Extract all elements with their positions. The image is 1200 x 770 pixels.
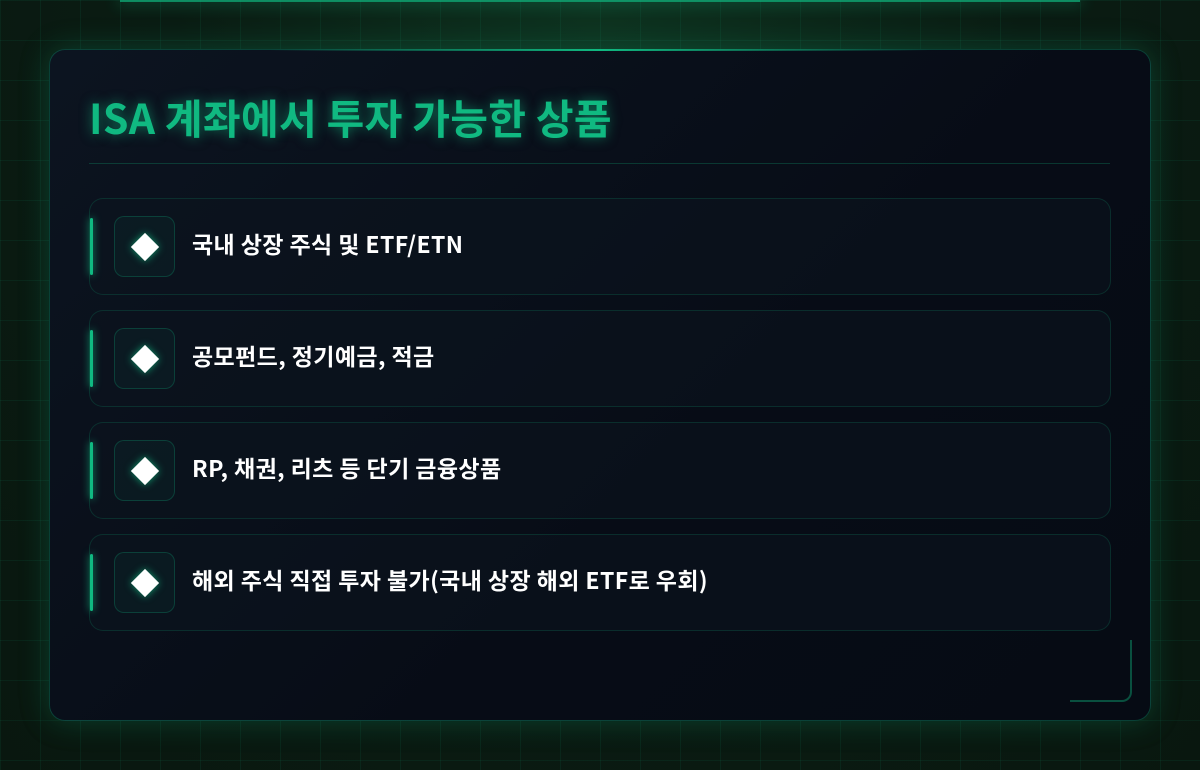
text: 해외 주식 직접 투자 불가(국내 상장 해외 ETF로 우회) [192,562,708,596]
text: 공모펀드, 정기예금, 적금 [192,338,435,372]
icon: diamond [114,552,175,613]
item 2 [89,310,1111,407]
title: ISA 계좌에서 투자 가능한 상품 [89,86,612,146]
text: 국내 상장 주식 및 ETF/ETN [192,226,463,260]
icon: diamond [114,328,175,389]
text: RP, 채권, 리츠 등 단기 금융상품 [192,450,502,484]
icon: diamond [114,440,175,501]
item 3 [89,422,1111,519]
item 1 [89,198,1111,295]
corner bracket [1070,640,1132,702]
item 4 [89,534,1111,631]
icon: diamond [114,216,175,277]
